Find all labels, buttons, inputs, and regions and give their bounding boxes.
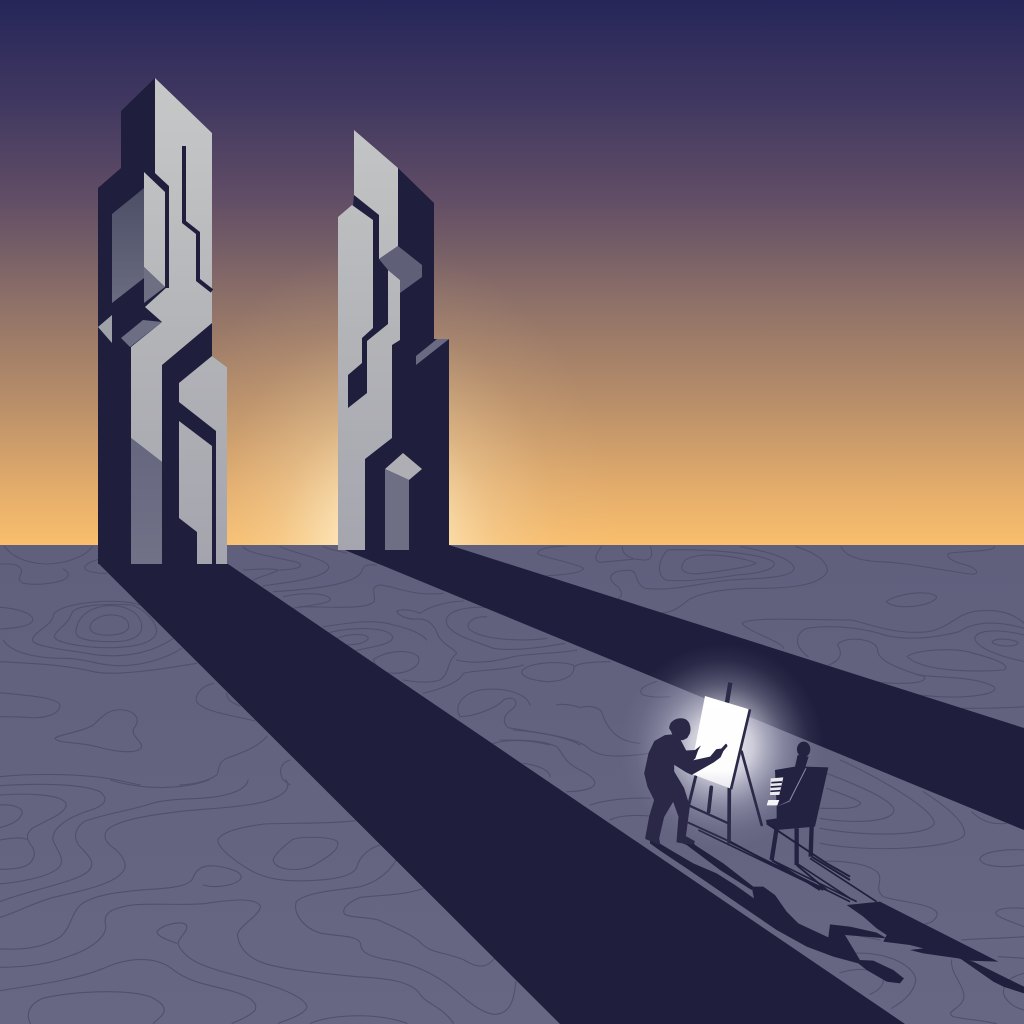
painter raised hand bbox=[683, 745, 701, 763]
cast shadows of painter and seated figure bbox=[650, 830, 1024, 993]
painter silhouette bbox=[645, 719, 727, 844]
right tower lit top face bbox=[354, 130, 398, 259]
horizon sun glow bbox=[100, 240, 700, 546]
small grey ledge bbox=[121, 320, 162, 347]
dark seam next to box bbox=[153, 174, 167, 288]
figure cast shadow lines near legs bbox=[730, 823, 850, 890]
painter, easel and seated figure bbox=[645, 683, 850, 890]
painter second leg shadow bbox=[678, 837, 753, 890]
left tower lit main face bbox=[131, 78, 212, 462]
lantern-like glow from canvas bbox=[620, 644, 824, 848]
long shadow of left tower bbox=[98, 563, 905, 1024]
projecting box underside bbox=[144, 267, 165, 303]
seated figure head bbox=[797, 742, 810, 757]
canvas dark edge bbox=[731, 709, 750, 789]
topographic contour lines on the ground bbox=[0, 545, 1024, 1024]
right tower lit main face bbox=[338, 205, 400, 550]
small left wedge bbox=[98, 315, 112, 343]
base block top bbox=[385, 453, 422, 480]
lower shaded face bbox=[131, 438, 162, 564]
accordion keys bbox=[767, 777, 783, 805]
chair legs bbox=[772, 827, 812, 865]
chair shadow bbox=[847, 902, 998, 962]
chair shadow tail bbox=[960, 958, 1024, 993]
easel legs and mast bbox=[688, 683, 762, 842]
painter shadow bbox=[650, 838, 904, 983]
easel and chair leg shadows bbox=[698, 830, 877, 902]
right lower lit panel bbox=[179, 421, 212, 564]
projecting box side bbox=[112, 188, 144, 303]
right tower dark silhouette bbox=[345, 168, 449, 550]
left tower dark silhouette bbox=[98, 78, 227, 564]
glowing canvas bbox=[690, 696, 749, 788]
sky gradient background bbox=[0, 0, 1024, 546]
left tower bbox=[98, 78, 227, 564]
ground plane bbox=[0, 545, 1024, 1024]
right tower bbox=[338, 130, 449, 550]
long shadow of right tower bbox=[340, 545, 1024, 830]
seated figure body bbox=[775, 755, 809, 807]
base block front bbox=[385, 469, 409, 550]
chair back highlight bbox=[790, 768, 806, 800]
slit in upper face bbox=[184, 146, 212, 291]
chair bbox=[766, 767, 828, 830]
projecting box front bbox=[144, 172, 165, 287]
grey cube bbox=[379, 246, 422, 293]
grey ledge bbox=[416, 339, 449, 365]
right upper lit panel bbox=[179, 356, 227, 564]
